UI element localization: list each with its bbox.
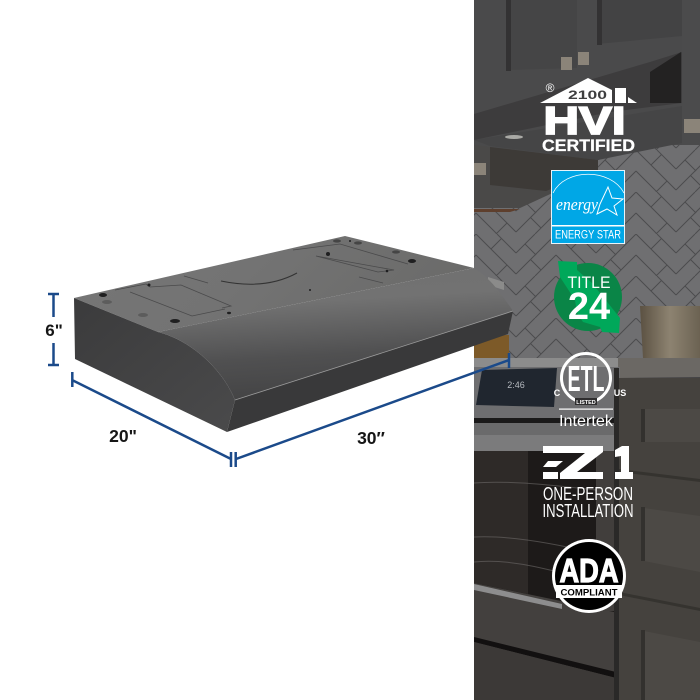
badge: HVI certified: HVI	[544, 100, 626, 143]
badge: Energy Star: ENERGY STAR	[555, 230, 621, 242]
background range hood	[474, 52, 682, 160]
oven window	[474, 451, 614, 612]
hood front lip	[227, 311, 513, 432]
badge: ETL listed Intertek: Intertek	[559, 413, 613, 430]
badge: HVI certified	[540, 78, 637, 155]
badge: ADA compliant: COMPLIANT	[560, 588, 618, 598]
badge: EZ1 one-person installation	[542, 446, 634, 521]
badge: ADA compliant	[552, 539, 626, 613]
badge: EZ1 one-person installation: ONE-PERSON	[543, 484, 633, 504]
badge: ADA compliant: ADA	[560, 552, 618, 589]
badge: ETL listed Intertek: ETL	[568, 358, 604, 399]
lower cabinets	[619, 378, 700, 700]
upper cabinets	[474, 0, 700, 212]
badge: ETL listed Intertek: LISTED	[576, 400, 596, 406]
badge: ETL listed Intertek: C	[554, 388, 561, 398]
badge: Title 24	[554, 261, 622, 333]
dimension: depth 20 inches	[72, 372, 231, 467]
hood side panel	[74, 298, 235, 432]
badge: Title 24: 24	[568, 286, 610, 328]
badge: HVI certified: 2100	[568, 88, 607, 102]
range cooker: 2:46	[507, 380, 525, 390]
mounting plate details	[115, 244, 408, 316]
backsplash tile	[474, 140, 700, 365]
hood bracket	[488, 277, 504, 290]
badge: HVI certified: CERTIFIED	[542, 136, 635, 155]
dimension: height 6 inches: 6"	[45, 321, 63, 340]
cooking pot	[640, 306, 700, 358]
badge: EZ1 one-person installation: INSTALLATION	[542, 501, 634, 521]
hood curved front	[158, 268, 513, 400]
badge: ETL listed Intertek: US	[614, 388, 626, 398]
dimension: height 6 inches	[45, 294, 63, 365]
countertop	[474, 358, 700, 378]
badge: Energy Star	[552, 170, 624, 244]
range cooker	[474, 367, 620, 700]
dimension: width 30 inches	[236, 353, 509, 467]
dimension: width 30 inches: 30″	[357, 428, 386, 448]
panel: kitchen photo	[474, 0, 700, 700]
badge: ETL listed Intertek	[554, 354, 626, 430]
product: under-cabinet range hood	[74, 236, 513, 432]
badge: HVI certified: ®	[546, 81, 555, 95]
hood top surface	[74, 236, 474, 332]
badge: Title 24: TITLE	[568, 273, 610, 292]
badge: Energy Star: energy	[556, 195, 598, 214]
dimension: depth 20 inches: 20"	[109, 426, 137, 446]
mosaic behind hood	[474, 335, 509, 359]
control display	[476, 368, 557, 407]
